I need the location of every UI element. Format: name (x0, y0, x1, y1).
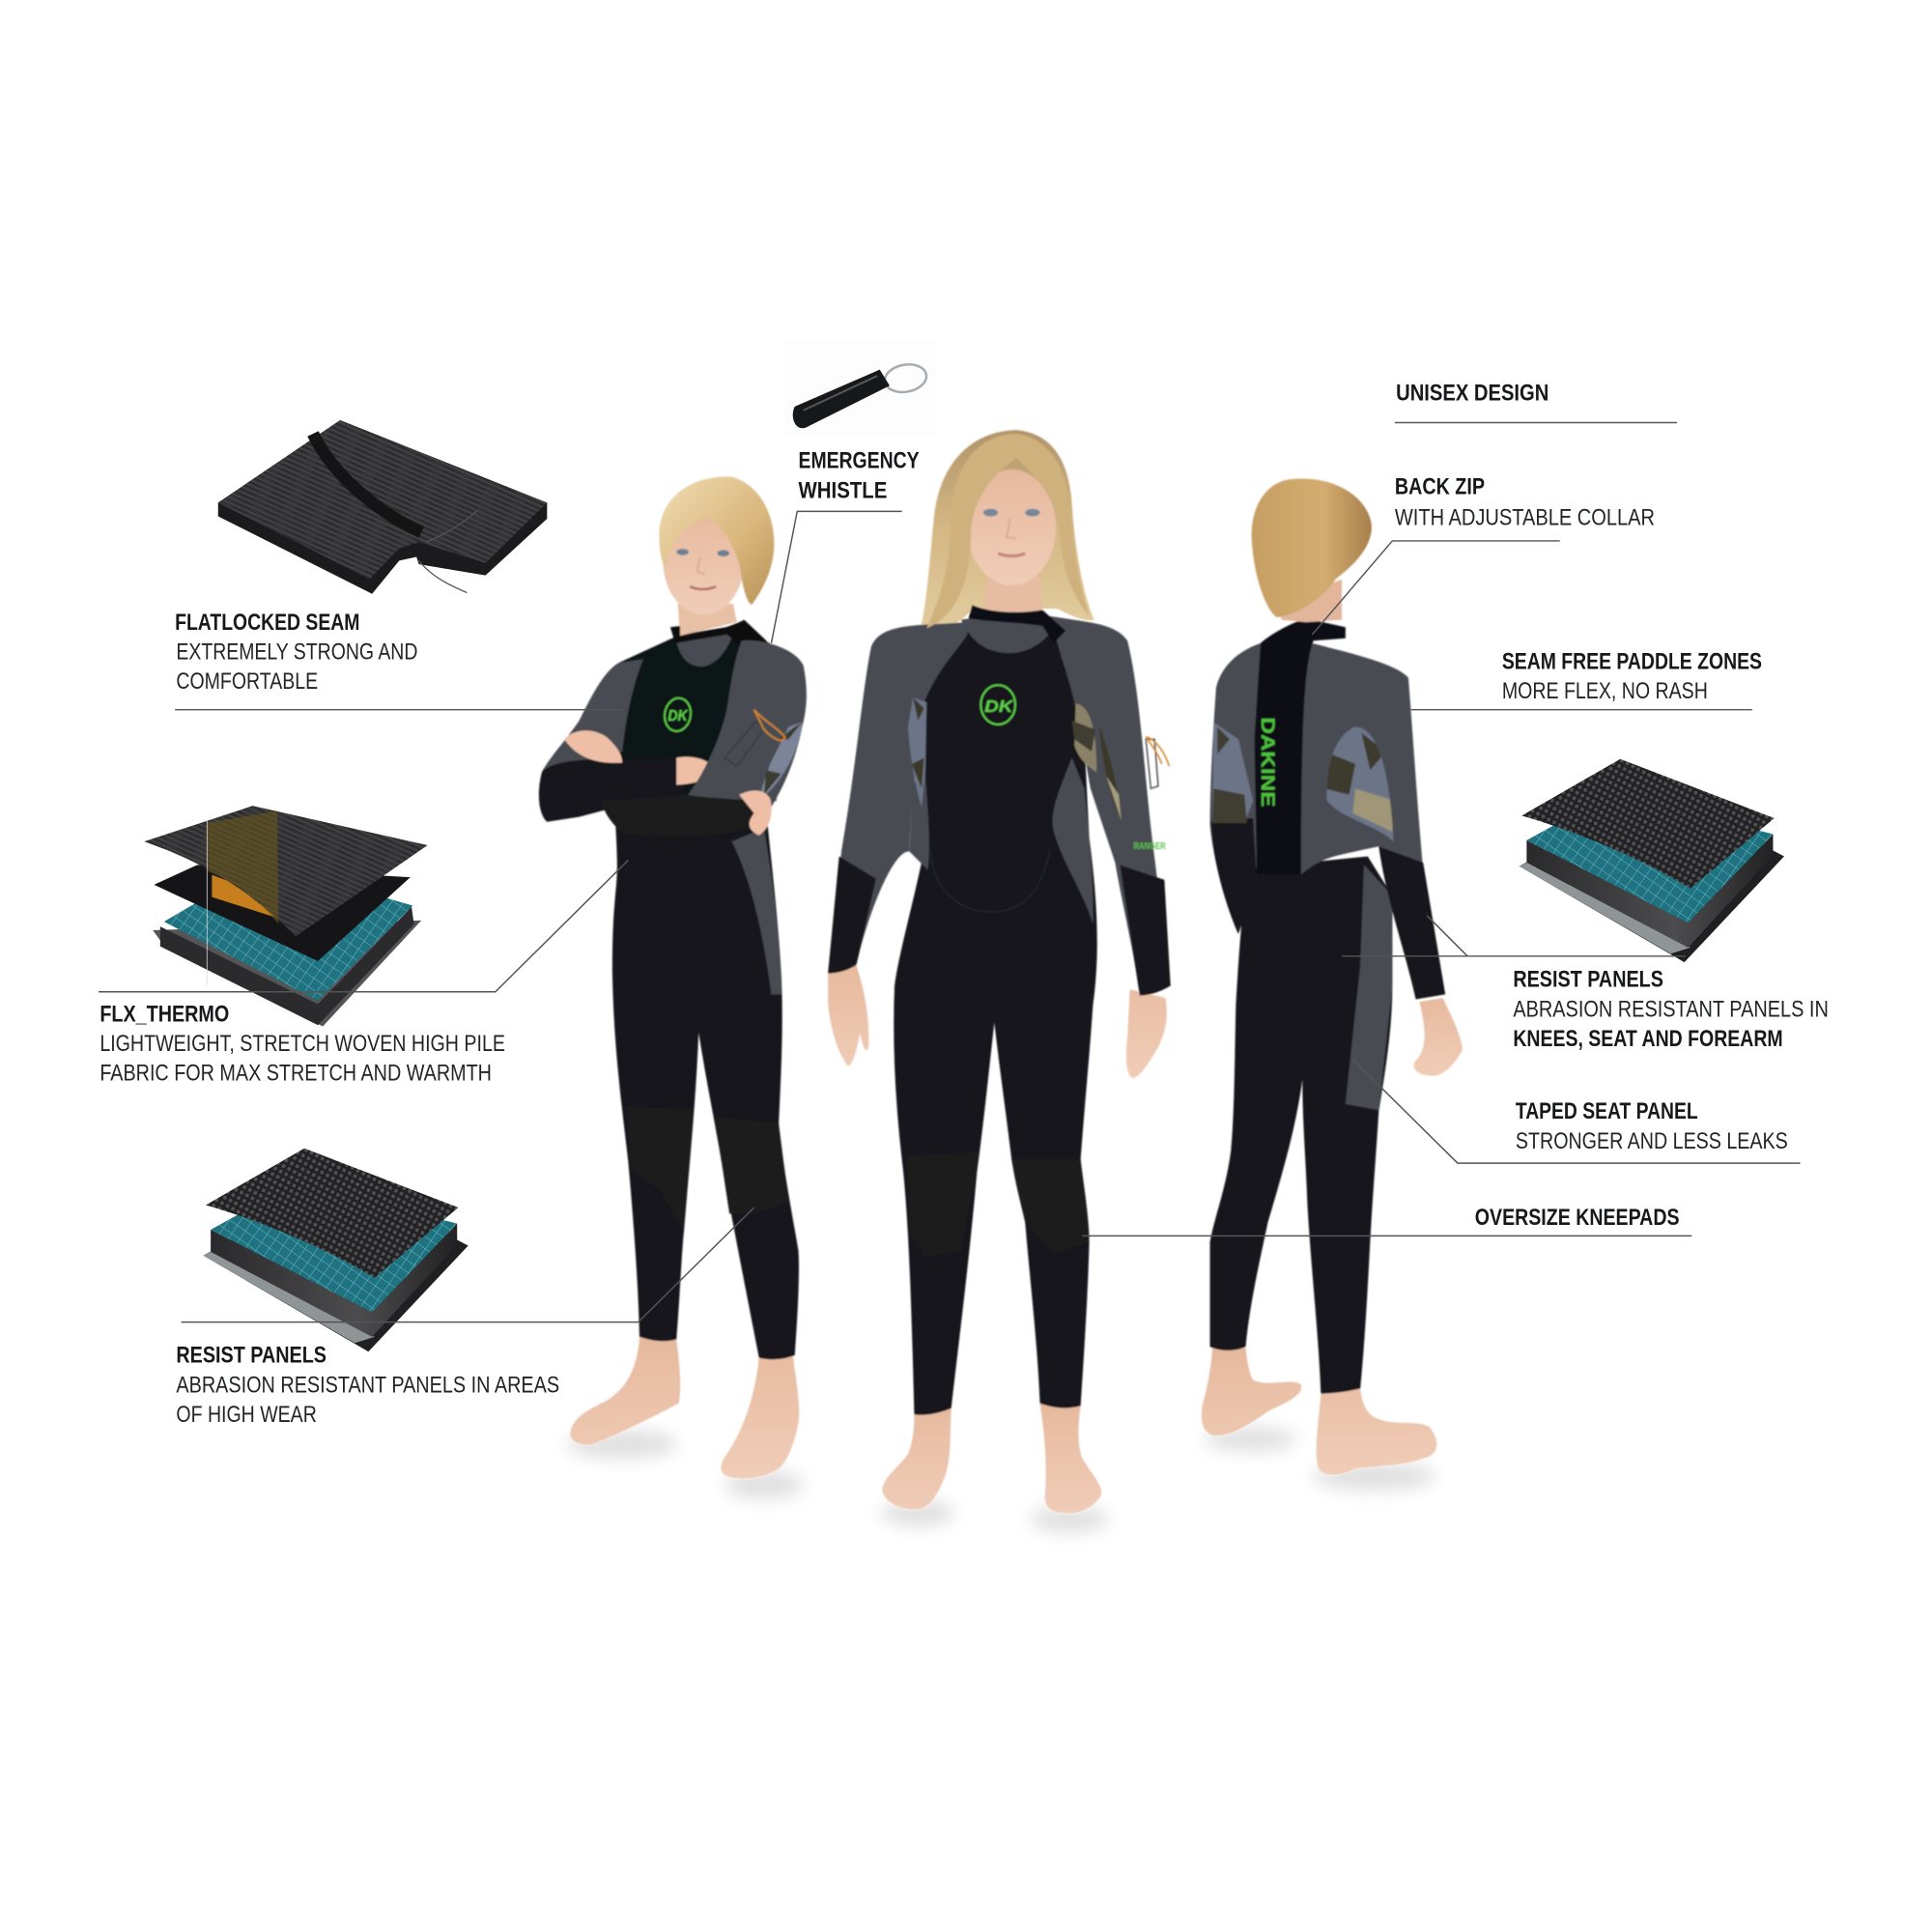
leader lines (99, 423, 1801, 1322)
text: back zip: WITH ADJUSTABLE COLLAR (1395, 504, 1655, 529)
logo (980, 685, 1015, 724)
gray sleeve (viewer right) (686, 640, 807, 807)
text: resist panels left: RESIST PANELS (176, 1343, 327, 1368)
text: flx thermo (99, 1001, 505, 1086)
figure: left boy front, arms crossed (539, 476, 807, 1499)
logo: DK (984, 696, 1014, 716)
gray sleeve (viewer left) (542, 659, 643, 777)
back gray panel (1257, 635, 1423, 875)
gray yoke (676, 631, 734, 667)
arm branding: RANGER (1133, 841, 1166, 852)
logo: DK (668, 708, 689, 724)
panel: flatlocked seam swatch (218, 420, 547, 594)
gray yoke (961, 617, 1054, 653)
shoulder camo (1326, 727, 1394, 841)
foot shadows (881, 1499, 1109, 1533)
pocket and orange cord (1146, 739, 1158, 788)
text: flx thermo: FABRIC FOR MAX STRETCH AND WARMTH (99, 1061, 492, 1086)
camo arm panel (757, 722, 802, 801)
legs and torso (612, 788, 799, 1359)
text: flx thermo: LIGHTWEIGHT, STRETCH WOVEN HIGH PILE (99, 1031, 505, 1056)
text: back zip (1395, 473, 1655, 529)
panel: resist panels swatch (right) (1520, 759, 1784, 962)
belly seam (930, 850, 1050, 912)
figure: right boy back view (1202, 479, 1463, 1491)
hair back (921, 430, 1094, 631)
sleeve right (1050, 616, 1171, 996)
foot shadows (567, 1430, 804, 1499)
seam band (313, 434, 421, 532)
text: resist panels right: RESIST PANELS (1513, 967, 1663, 992)
rear arm camo (1212, 722, 1253, 823)
text: resist panels right: KNEES, SEAT AND FOREARM (1513, 1026, 1783, 1051)
side gray panel (732, 828, 781, 994)
text: seam free paddle zones (1502, 649, 1762, 703)
text: resist panels right (1513, 967, 1829, 1051)
branding: DAKINE (1257, 717, 1277, 808)
knee panels (626, 1106, 788, 1233)
figure: middle girl front (828, 430, 1171, 1533)
face (967, 469, 1056, 585)
knee panels (907, 1152, 1090, 1257)
tucked hands (564, 730, 714, 784)
face (676, 549, 729, 556)
text: resist panels left: OF HIGH WEAR (176, 1402, 317, 1427)
collar and neck (678, 604, 737, 636)
text: flatlocked seam: FLATLOCKED SEAM (175, 610, 359, 635)
text: flatlocked seam: COMFORTABLE (176, 668, 318, 694)
gray seat stripe (1346, 865, 1392, 1110)
hand (1414, 998, 1463, 1076)
panel: FLX thermo swatch (144, 806, 428, 1026)
feet (1202, 1348, 1436, 1475)
text: taped seat panel: TAPED SEAT PANEL (1516, 1098, 1698, 1123)
upper torso (616, 625, 788, 801)
text: flx thermo: FLX_THERMO (99, 1001, 229, 1026)
feet (882, 1404, 1101, 1513)
logo (662, 696, 694, 733)
icon: emergency whistle (786, 339, 936, 438)
sleeve left (828, 622, 967, 974)
panel: resist panels swatch (left) (203, 1149, 469, 1351)
text: unisex design: UNISEX DESIGN (1396, 381, 1548, 406)
feet (570, 1337, 799, 1479)
zip strip (1254, 618, 1346, 875)
neck (1279, 579, 1342, 622)
head (663, 506, 744, 614)
side gray panels (909, 754, 1094, 924)
text: emergency whistle: EMERGENCY (799, 448, 920, 473)
lower hand (739, 790, 772, 836)
forearms black (828, 856, 1171, 996)
text: taped seat panel: STRONGER AND LESS LEAKS (1516, 1128, 1788, 1153)
camo side panels (908, 697, 926, 807)
hands (828, 965, 1167, 1078)
collar (969, 605, 1065, 643)
text: flatlocked seam (175, 610, 417, 694)
forearm upper black (539, 757, 686, 822)
text: emergency whistle: WHISTLE (799, 477, 887, 502)
text: resist panels left: ABRASION RESISTANT PANELS IN AREAS (176, 1372, 559, 1397)
neck (983, 567, 1042, 612)
text: emergency whistle (799, 448, 920, 502)
legs and lower torso (1210, 856, 1392, 1394)
text: back zip: BACK ZIP (1395, 473, 1485, 498)
hair (1252, 479, 1372, 617)
foot shadows (1204, 1427, 1435, 1491)
text: taped seat panel (1516, 1098, 1788, 1153)
pocket and orange cord (724, 721, 764, 766)
text: oversize kneepads: OVERSIZE KNEEPADS (1475, 1205, 1680, 1230)
forearm lower black (601, 795, 766, 837)
suit torso and legs (894, 622, 1097, 1415)
forearm right (1378, 846, 1445, 999)
rear arm (1210, 643, 1263, 934)
text: seam free paddle zones: MORE FLEX, NO RASH (1502, 678, 1708, 703)
loose thread (419, 510, 478, 593)
text: flatlocked seam: EXTREMELY STRONG AND (176, 639, 417, 664)
text: resist panels left (176, 1343, 559, 1427)
text: resist panels right: ABRASION RESISTANT PANELS IN (1513, 996, 1829, 1021)
text: seam free paddle zones: SEAM FREE PADDLE ZONES (1502, 649, 1762, 674)
